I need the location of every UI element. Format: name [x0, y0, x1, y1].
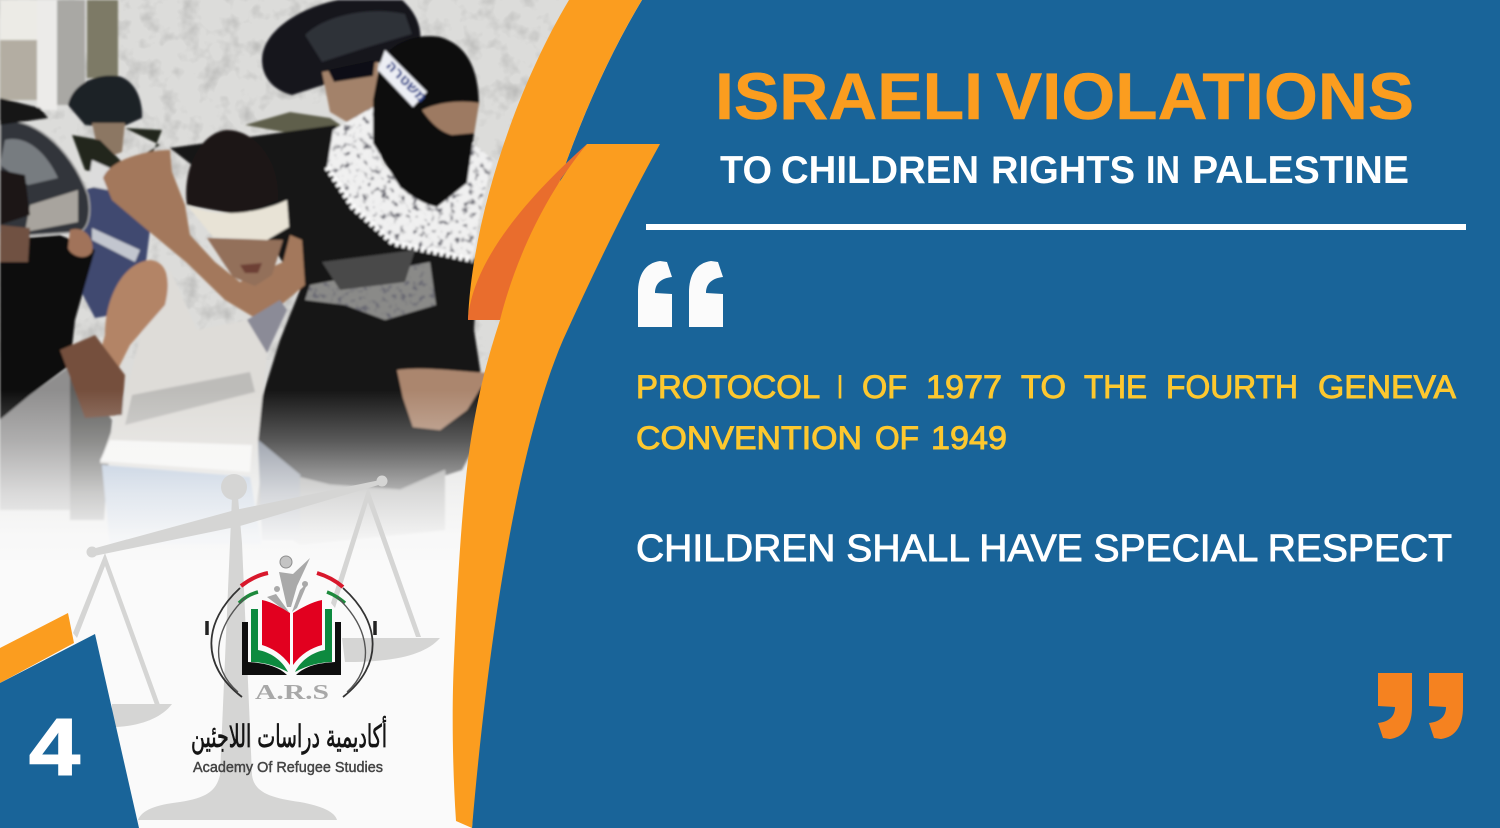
light lower background: [0, 560, 500, 828]
quote source: OF: [875, 420, 919, 456]
helmet soldier: [262, 0, 420, 95]
photo: masked soldier detaining a blindfolded child: [0, 0, 600, 560]
photo fade to white: [0, 390, 500, 562]
child head with hair, blindfold, face: [207, 238, 283, 286]
divider: [646, 224, 1466, 230]
quote source: PROTOCOL: [636, 369, 819, 405]
swoosh: upper orange band: [468, 0, 642, 320]
icon: opening quotation mark: [638, 261, 723, 327]
left figure and shield: [0, 235, 95, 420]
quote text: CHILDREN SHALL HAVE SPECIAL RESPECT: [636, 528, 1452, 570]
swoosh: dark orange fold: [468, 144, 587, 320]
logo arcs: [207, 573, 375, 697]
background soldier: [68, 76, 142, 128]
badge: orange backing: [0, 613, 74, 683]
subtitle: CHILDREN: [781, 149, 979, 192]
panel: blue content background: [472, 0, 1500, 828]
police band on hood: [378, 50, 427, 107]
keffiyeh scarf: [327, 107, 493, 260]
subtitle: IN: [1146, 149, 1180, 192]
logo arabic name: أكاديمية دراسات اللاجئين: [191, 716, 387, 755]
quote source: OF: [862, 369, 907, 405]
quote source: FOURTH: [1166, 369, 1298, 405]
hood and mask: [373, 36, 479, 207]
swoosh: lower orange band: [453, 144, 660, 828]
blue shirted figure: [75, 175, 150, 318]
quote source: I: [837, 369, 843, 405]
quote source: GENEVA: [1318, 369, 1457, 405]
icon: closing quotation mark: [1378, 673, 1463, 739]
subtitle: RIGHTS: [991, 149, 1135, 192]
quote source: 1977: [926, 369, 1002, 405]
logo initials: A.R.S: [255, 680, 329, 704]
quote source: TO: [1021, 369, 1066, 405]
soldier hand: [397, 369, 490, 430]
quote source: 1949: [931, 420, 1007, 456]
logo: Academy of Refugee Studies: [191, 556, 387, 776]
soldier arm around child: [103, 150, 305, 318]
subtitle: TO: [720, 149, 772, 192]
quote source: CONVENTION: [636, 420, 862, 456]
icon: scales of justice: [73, 474, 440, 820]
quote source: THE: [1084, 369, 1147, 405]
badge: blue number panel: [0, 634, 139, 828]
logo english name: Academy Of Refugee Studies: [193, 760, 383, 776]
subtitle: PALESTINE: [1192, 149, 1409, 192]
child body: tank top and arms: [100, 270, 267, 475]
photo: masked soldier detaining a blindfolded child: משטרה: [382, 56, 431, 106]
title: VIOLATIONS: [996, 59, 1414, 133]
black shirt torso: [170, 125, 488, 490]
slide number: 4: [29, 703, 80, 793]
logo book: [242, 622, 341, 675]
jeans: [102, 465, 262, 545]
logo figures: [267, 556, 310, 612]
title: ISRAELI: [715, 59, 983, 133]
